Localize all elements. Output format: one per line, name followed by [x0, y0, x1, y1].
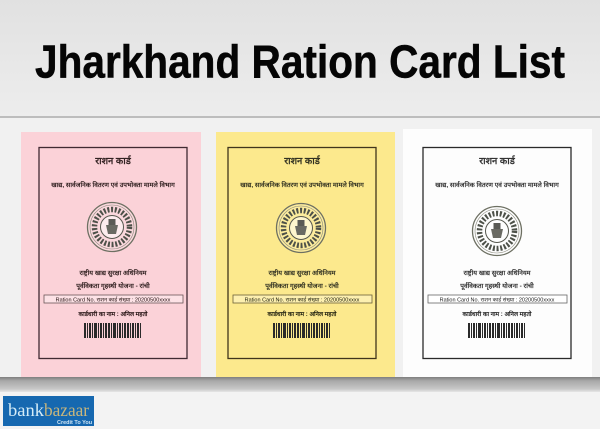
card number: Ration Card No. राशन कार्ड संख्या : 20200500xxxx — [245, 296, 360, 304]
logo: bankbazaar — [3, 396, 94, 426]
logo: bankbazaar: bank — [8, 400, 44, 420]
card title: राशन कार्ड — [94, 155, 132, 167]
card number: Ration Card No. राशन कार्ड संख्या : 20200500xxxx — [56, 296, 171, 304]
card number — [428, 295, 567, 304]
card number: Ration Card No. राशन कार्ड संख्या : 20200500xxxx — [440, 296, 555, 304]
barcode — [468, 323, 525, 338]
barcode — [273, 323, 330, 338]
holder: कार्डधारी का नाम : अनिल महतो — [462, 310, 532, 318]
card number — [233, 295, 372, 304]
card: pink — [21, 132, 201, 377]
holder: कार्डधारी का नाम : अनिल महतो — [267, 310, 337, 318]
scheme lines: राष्ट्रीय खाद्य सुरक्षा अधिनियम — [78, 269, 148, 277]
card: yellow: पूर्वविकता गृहस्थी योजना - रांची — [264, 282, 339, 290]
department: खाद्य, सार्वजनिक वितरण एवं उपभोक्ता मामले विभाग — [434, 181, 559, 189]
card: white: पूर्वविकता गृहस्थी योजना - रांची — [459, 282, 534, 290]
department: खाद्य, सार्वजनिक वितरण एवं उपभोक्ता मामले विभाग — [239, 181, 364, 189]
card: white — [403, 129, 592, 377]
department: खाद्य, सार्वजनिक वितरण एवं उपभोक्ता मामले विभाग — [50, 181, 175, 189]
shelf — [0, 377, 600, 392]
logo: bankbazaar: bazaar — [44, 400, 89, 420]
emblem — [88, 202, 136, 252]
card title: राशन कार्ड — [283, 155, 321, 167]
card title: राशन कार्ड — [478, 155, 516, 167]
card: yellow — [216, 132, 395, 377]
logo: bankbazaar: Credit To You — [57, 420, 92, 426]
scheme lines: राष्ट्रीय खाद्य सुरक्षा अधिनियम — [267, 269, 337, 277]
holder: कार्डधारी का नाम : अनिल महतो — [78, 310, 148, 318]
scheme lines: राष्ट्रीय खाद्य सुरक्षा अधिनियम — [462, 269, 532, 277]
barcode — [84, 323, 141, 338]
emblem — [276, 204, 326, 252]
emblem — [472, 206, 522, 256]
card number — [44, 295, 183, 304]
card: pink: पूर्वविकता गृहस्थी योजना - रांची — [75, 282, 150, 290]
